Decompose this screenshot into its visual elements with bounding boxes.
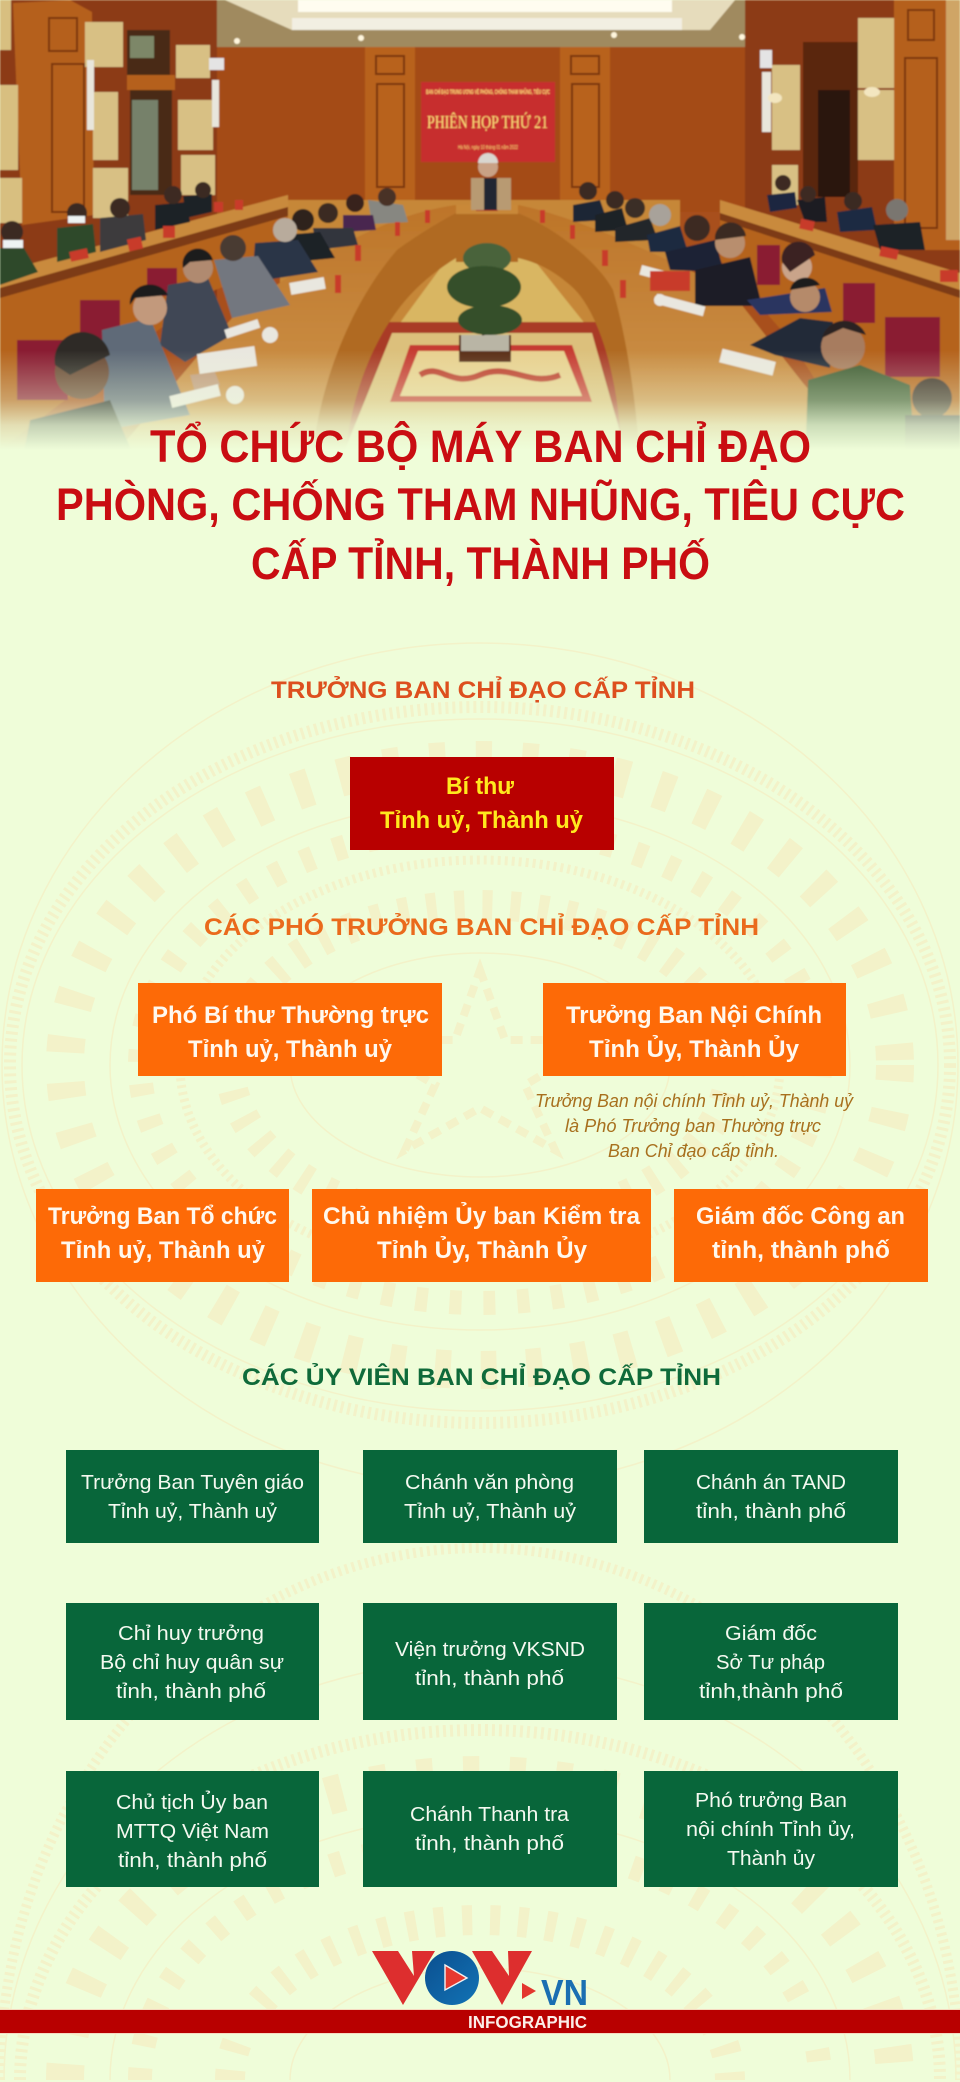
main title: TỔ CHỨC BỘ MÁY BAN CHỈ ĐẠO bbox=[150, 421, 811, 472]
box: military commander bbox=[66, 1603, 319, 1720]
ceiling bbox=[216, 0, 746, 48]
box: chief of office bbox=[363, 1450, 617, 1543]
box: chief prosecutor: Viện trưởng VKSND bbox=[395, 1639, 585, 1661]
watermark: bronze drum lower bbox=[0, 1548, 960, 2080]
italic note: Trưởng Ban nội chính Tỉnh uỷ, Thành uỷ bbox=[535, 1091, 854, 1111]
box: military commander: Bộ chỉ huy quân sự bbox=[100, 1652, 284, 1674]
box: propaganda head bbox=[66, 1450, 319, 1543]
box: chief prosecutor bbox=[363, 1603, 617, 1720]
heading: members: CÁC ỦY VIÊN BAN CHỈ ĐẠO CẤP TỈNH bbox=[242, 1362, 721, 1391]
box: standing deputy secretary bbox=[138, 983, 442, 1076]
italic note bbox=[535, 1091, 854, 1161]
main title bbox=[56, 421, 905, 589]
box: justice director: Giám đốc bbox=[725, 1623, 817, 1645]
box: head of internal affairs bbox=[543, 983, 846, 1076]
logo: VOV.VN: VN bbox=[541, 1972, 588, 2013]
box: deputy head of internal affairs: Phó trưởng Ban bbox=[695, 1790, 847, 1812]
box: party secretary: Tỉnh uỷ, Thành uỷ bbox=[380, 807, 584, 834]
box: deputy head of internal affairs: nội chính Tỉnh ủy, bbox=[686, 1819, 855, 1841]
box: head of inspection commission bbox=[312, 1189, 651, 1282]
footer bar bbox=[0, 2009, 960, 2034]
box: standing deputy secretary: Phó Bí thư Thường trực bbox=[152, 1002, 429, 1029]
box: fatherland front chairman: tỉnh, thành phố bbox=[118, 1850, 267, 1872]
box: fatherland front chairman: MTTQ Việt Nam bbox=[116, 1821, 269, 1843]
box: chief of office: Tỉnh uỷ, Thành uỷ bbox=[404, 1501, 576, 1523]
box: police director bbox=[674, 1189, 928, 1282]
box: police director: Giám đốc Công an bbox=[696, 1203, 905, 1230]
speaker bbox=[471, 153, 511, 210]
photo fade to background bbox=[0, 350, 960, 450]
head table bbox=[456, 205, 518, 262]
watermark: bronze drum upper bbox=[2, 643, 958, 1487]
banner: Hà Nội, ngày 10 tháng 01 năm 2022 bbox=[458, 145, 518, 151]
box: head of internal affairs: Trưởng Ban Nội Chính bbox=[566, 1002, 822, 1029]
banner bbox=[421, 82, 555, 162]
box: justice director: Sở Tư pháp bbox=[716, 1652, 825, 1674]
box: party secretary bbox=[350, 757, 614, 850]
box: head of inspection commission: Chủ nhiệm Ủy ban Kiểm tra bbox=[323, 1201, 640, 1230]
main title: PHÒNG, CHỐNG THAM NHŨNG, TIÊU CỰC bbox=[56, 479, 905, 530]
box: chief inspector: Chánh Thanh tra bbox=[410, 1804, 570, 1826]
box: head of organisation: Trưởng Ban Tổ chức bbox=[48, 1203, 277, 1230]
box: party secretary: Bí thư bbox=[446, 773, 515, 800]
box: police director: tỉnh, thành phố bbox=[712, 1237, 890, 1264]
box: chief judge: Chánh án TAND bbox=[696, 1472, 846, 1494]
box: propaganda head: Trưởng Ban Tuyên giáo bbox=[81, 1472, 304, 1494]
box: deputy head of internal affairs: Thành ủy bbox=[727, 1848, 815, 1870]
floor and carpet bbox=[280, 200, 680, 450]
box: fatherland front chairman bbox=[66, 1771, 319, 1887]
left wall bbox=[0, 0, 224, 300]
italic note: là Phó Trưởng ban Thường trực bbox=[565, 1116, 821, 1136]
box: chief judge bbox=[644, 1450, 898, 1543]
banner: PHIÊN HỌP THỨ 21 bbox=[427, 111, 548, 132]
box: chief prosecutor: tỉnh, thành phố bbox=[415, 1668, 564, 1690]
main table right arm bbox=[517, 206, 808, 436]
box: deputy head of internal affairs bbox=[644, 1771, 898, 1887]
box: head of organisation: Tỉnh uỷ, Thành uỷ bbox=[61, 1237, 265, 1264]
people left bbox=[0, 182, 408, 470]
box: head of organisation bbox=[36, 1189, 289, 1282]
header photo: meeting room bbox=[0, 0, 960, 470]
italic note: Ban Chỉ đạo cấp tỉnh. bbox=[608, 1141, 779, 1161]
footer bar: INFOGRAPHIC bbox=[468, 2012, 587, 2032]
box: military commander: tỉnh, thành phố bbox=[116, 1681, 266, 1703]
box: head of inspection commission: Tỉnh Ủy, Thành Ủy bbox=[377, 1235, 587, 1264]
box: standing deputy secretary: Tỉnh uỷ, Thành uỷ bbox=[188, 1036, 392, 1063]
box: chief of office: Chánh văn phòng bbox=[405, 1472, 574, 1494]
main table left arm bbox=[133, 205, 457, 436]
heading: deputy heads: CÁC PHÓ TRƯỞNG BAN CHỈ ĐẠO CẤP TỈNH bbox=[204, 912, 759, 941]
box: military commander: Chỉ huy trưởng bbox=[118, 1623, 264, 1645]
right wall bbox=[745, 0, 960, 300]
heading: head of committee: TRƯỞNG BAN CHỈ ĐẠO CẤP TỈNH bbox=[271, 675, 695, 704]
box: chief inspector: tỉnh, thành phố bbox=[415, 1833, 564, 1855]
box: chief inspector bbox=[363, 1771, 617, 1887]
table items bbox=[69, 200, 958, 408]
bonsai bbox=[447, 243, 522, 362]
box: propaganda head: Tỉnh uỷ, Thành uỷ bbox=[108, 1501, 277, 1523]
main title: CẤP TỈNH, THÀNH PHỐ bbox=[251, 538, 710, 589]
logo: VOV.VN bbox=[372, 1951, 588, 2013]
box: justice director: tỉnh,thành phố bbox=[699, 1681, 843, 1703]
box: chief judge: tỉnh, thành phố bbox=[696, 1501, 846, 1523]
banner: BAN CHỈ ĐẠO TRUNG ƯƠNG VỀ PHÒNG, CHỐNG THAM NHŨNG, TIÊU CỰC bbox=[426, 88, 550, 96]
box: head of internal affairs: Tỉnh Ủy, Thành Ủy bbox=[589, 1034, 799, 1063]
back wall bbox=[365, 47, 610, 200]
people right bbox=[573, 175, 960, 460]
right far table and row bbox=[719, 200, 960, 413]
left far table and row bbox=[0, 194, 289, 412]
box: justice director bbox=[644, 1603, 898, 1720]
box: fatherland front chairman: Chủ tịch Ủy ban bbox=[116, 1790, 268, 1814]
